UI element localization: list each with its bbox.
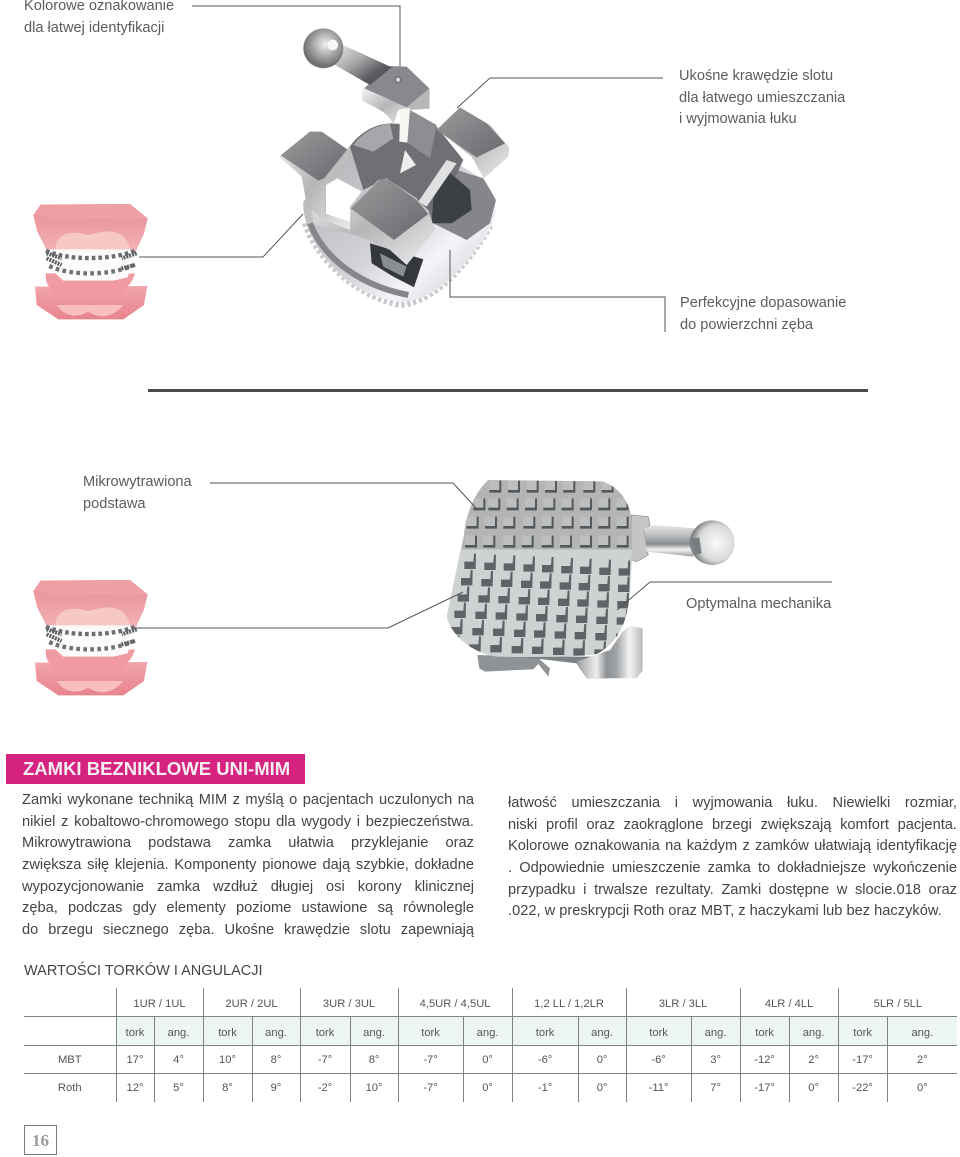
torque and angulation table: 8° (271, 1054, 281, 1066)
torque and angulation table: tork (853, 1026, 872, 1038)
callout line: colour coding (192, 6, 400, 77)
body text left column: wypozycjonowanie zamka wzdłuż długiej osi korony klinicznej (22, 878, 474, 894)
torque and angulation table: -12° (754, 1054, 775, 1066)
torque and angulation table: 3UR / 3UL (323, 998, 375, 1010)
torque and angulation table: -6° (651, 1054, 666, 1066)
hook wing (406, 110, 437, 158)
slot under front wing (370, 243, 423, 287)
torque and angulation table: 8° (369, 1054, 379, 1066)
label: slot edges: i wyjmowania łuku (679, 111, 797, 127)
callout line: etched base (210, 483, 476, 508)
body text right column: łatwość umieszczania i wyjmowania łuku. Niewielki rozmiar, (508, 795, 957, 811)
torque and angulation table: 1,2 LL / 1,2LR (534, 998, 604, 1010)
torque and angulation table: 12° (127, 1082, 143, 1094)
body text left column (22, 792, 474, 938)
body text left column: zwiększa siłę klejenia. Komponenty pionowe dają szybkie, dokładne (22, 857, 474, 873)
torque and angulation table: 0° (482, 1082, 493, 1094)
torque and angulation table: 10° (219, 1054, 236, 1066)
base pad teeth (305, 223, 492, 305)
mesh upper (461, 480, 632, 550)
torque and angulation table: 2° (808, 1054, 819, 1066)
callout line: slot edges (457, 78, 663, 108)
torque and angulation table: 9° (271, 1082, 281, 1094)
torque and angulation table: tork (316, 1026, 334, 1038)
torque and angulation table: 1UR / 1UL (133, 998, 186, 1010)
table heading: WARTOŚCI TORKÓW I ANGULACJI (24, 963, 262, 979)
heading banner: ZAMKI BEZNIKLOWE UNI-MIM (23, 758, 290, 779)
torque and angulation table: ang. (477, 1026, 498, 1038)
torque and angulation table: 4LR / 4LL (765, 998, 813, 1010)
central body (350, 123, 463, 223)
torque and angulation table: MBT (58, 1054, 82, 1066)
torque and angulation table: 0° (597, 1082, 607, 1094)
torque and angulation table: 10° (366, 1082, 382, 1094)
heading banner (6, 754, 305, 784)
torque and angulation table: ang. (363, 1026, 385, 1038)
label: etched base: Mikrowytrawiona (83, 474, 192, 490)
torque and angulation table: -22° (852, 1082, 873, 1094)
label: surface fit: Perfekcyjne dopasowanie (680, 295, 846, 311)
callout line: mechanics (617, 582, 832, 610)
body text right column: . Odpowiednie umieszczenie zamka to dokładniejsze wykończenie (508, 860, 957, 876)
torque and angulation table: tork (536, 1026, 554, 1038)
torque and angulation table: -11° (649, 1082, 668, 1094)
torque and angulation table (24, 988, 957, 1102)
illustrations and leader lines (33, 6, 868, 696)
dental model with braces, top (33, 204, 148, 319)
bracket, base view (443, 477, 735, 678)
torque and angulation table: tork (421, 1026, 440, 1038)
torque and angulation table: ang. (705, 1026, 726, 1038)
body text left column: zęba, podczas gdy elementy poziome ustawione są równolegle (22, 900, 474, 916)
torque and angulation table: 2UR / 2UL (225, 998, 278, 1010)
label: etched base (83, 474, 192, 512)
torque and angulation table: 4° (173, 1054, 184, 1066)
label: etched base: podstawa (83, 496, 145, 512)
label: colour coding (24, 0, 174, 36)
body text left column: Zamki wykonane techniką MIM z myślą o pacjentach uczulonych na (22, 792, 474, 808)
torque and angulation table: 5° (173, 1082, 184, 1094)
teeth (48, 249, 135, 281)
body text left column: nikiel z kobaltowo-chromowego stopu dla wygody i bezpieczeństwa. (22, 814, 474, 830)
body text right column: niski profil oraz zaokrąglone brzegi zwiększają komfort pacjenta. (508, 817, 957, 833)
upper arch (33, 204, 148, 253)
mesh lower (443, 549, 637, 659)
label: slot edges: Ukośne krawędzie slotu (679, 68, 833, 84)
front tie wing (312, 180, 435, 265)
torque and angulation table: -7° (423, 1054, 438, 1066)
label: surface fit (680, 295, 846, 333)
torque and angulation table: ang. (265, 1026, 287, 1038)
brace wires (46, 250, 137, 258)
body text left column: do brzegu siecznego zęba. Ukośne krawędzie slotu zapewniają (22, 922, 474, 938)
body text right column (508, 795, 957, 919)
torque and angulation table: tork (218, 1026, 237, 1038)
torque and angulation table: 3LR / 3LL (659, 998, 707, 1010)
torque and angulation table: ang. (911, 1026, 933, 1038)
torque and angulation table: 7° (710, 1082, 721, 1094)
lower tie wings (477, 655, 550, 677)
stem (632, 515, 650, 562)
torque and angulation table: 8° (222, 1082, 233, 1094)
body text right column: przypadku i trwalsze rezultaty. Zamki dostępne w slocie.018 oraz (508, 882, 957, 898)
label: slot edges: dla łatwego umieszczania (679, 90, 845, 106)
label: slot edges (679, 68, 846, 127)
body text right column: Kolorowe oznakowania na każdym z zamków ułatwiają identyfikację (508, 838, 957, 854)
torque and angulation table: -2° (318, 1082, 332, 1094)
left tie wing (279, 132, 352, 232)
torque and angulation table: 4,5UR / 4,5UL (420, 998, 490, 1010)
callout line: etched base lower (135, 592, 463, 628)
ball (303, 28, 343, 68)
callout line: base surface fit (450, 250, 665, 332)
torque and angulation table: ang. (803, 1026, 824, 1038)
callout line: base fit left (139, 214, 303, 257)
label: mechanics: Optymalna mechanika (686, 596, 831, 612)
dental model with braces, bottom (33, 580, 148, 695)
right tie wing (437, 107, 509, 178)
torque and angulation table: -6° (538, 1054, 552, 1066)
torque and angulation table: 5LR / 5LL (874, 998, 922, 1010)
torque and angulation table: 0° (917, 1082, 928, 1094)
body text right column: .022, w preskrypcji Roth oraz MBT, z haczykami lub bez haczyków. (508, 903, 942, 919)
ball (690, 520, 735, 565)
arm (644, 525, 695, 557)
torque and angulation table: 3° (710, 1054, 721, 1066)
torque and angulation table: -7° (318, 1054, 332, 1066)
torque and angulation table: 0° (597, 1054, 607, 1066)
torque and angulation table: -17° (754, 1082, 775, 1094)
torque and angulation table: -7° (423, 1082, 438, 1094)
torque and angulation table: 2° (917, 1054, 928, 1066)
lower arch (35, 286, 147, 319)
torque and angulation table: -1° (538, 1082, 552, 1094)
divider rule (148, 389, 868, 392)
torque and angulation table: -17° (852, 1054, 873, 1066)
torque and angulation table: tork (649, 1026, 668, 1038)
label: surface fit: do powierzchni zęba (680, 317, 813, 333)
torque and angulation table: 17° (127, 1054, 143, 1066)
torque and angulation table: Roth (58, 1082, 82, 1094)
label: colour coding: dla łatwej identyfikacji (24, 20, 164, 36)
torque and angulation table: tork (126, 1026, 144, 1038)
torque and angulation table: tork (755, 1026, 774, 1038)
torque and angulation table: ang. (168, 1026, 189, 1038)
torque and angulation table: ang. (591, 1026, 613, 1038)
page number: 16 (32, 1131, 49, 1150)
torque and angulation table: 0° (808, 1082, 819, 1094)
arm (335, 45, 392, 85)
body text left column: Mikrowytrawiona podstawa zamka ułatwia przyklejanie oraz (22, 835, 474, 851)
torque and angulation table: 0° (482, 1054, 493, 1066)
base pad (303, 123, 496, 301)
page number (24, 1125, 57, 1155)
bracket, top view (279, 28, 509, 305)
